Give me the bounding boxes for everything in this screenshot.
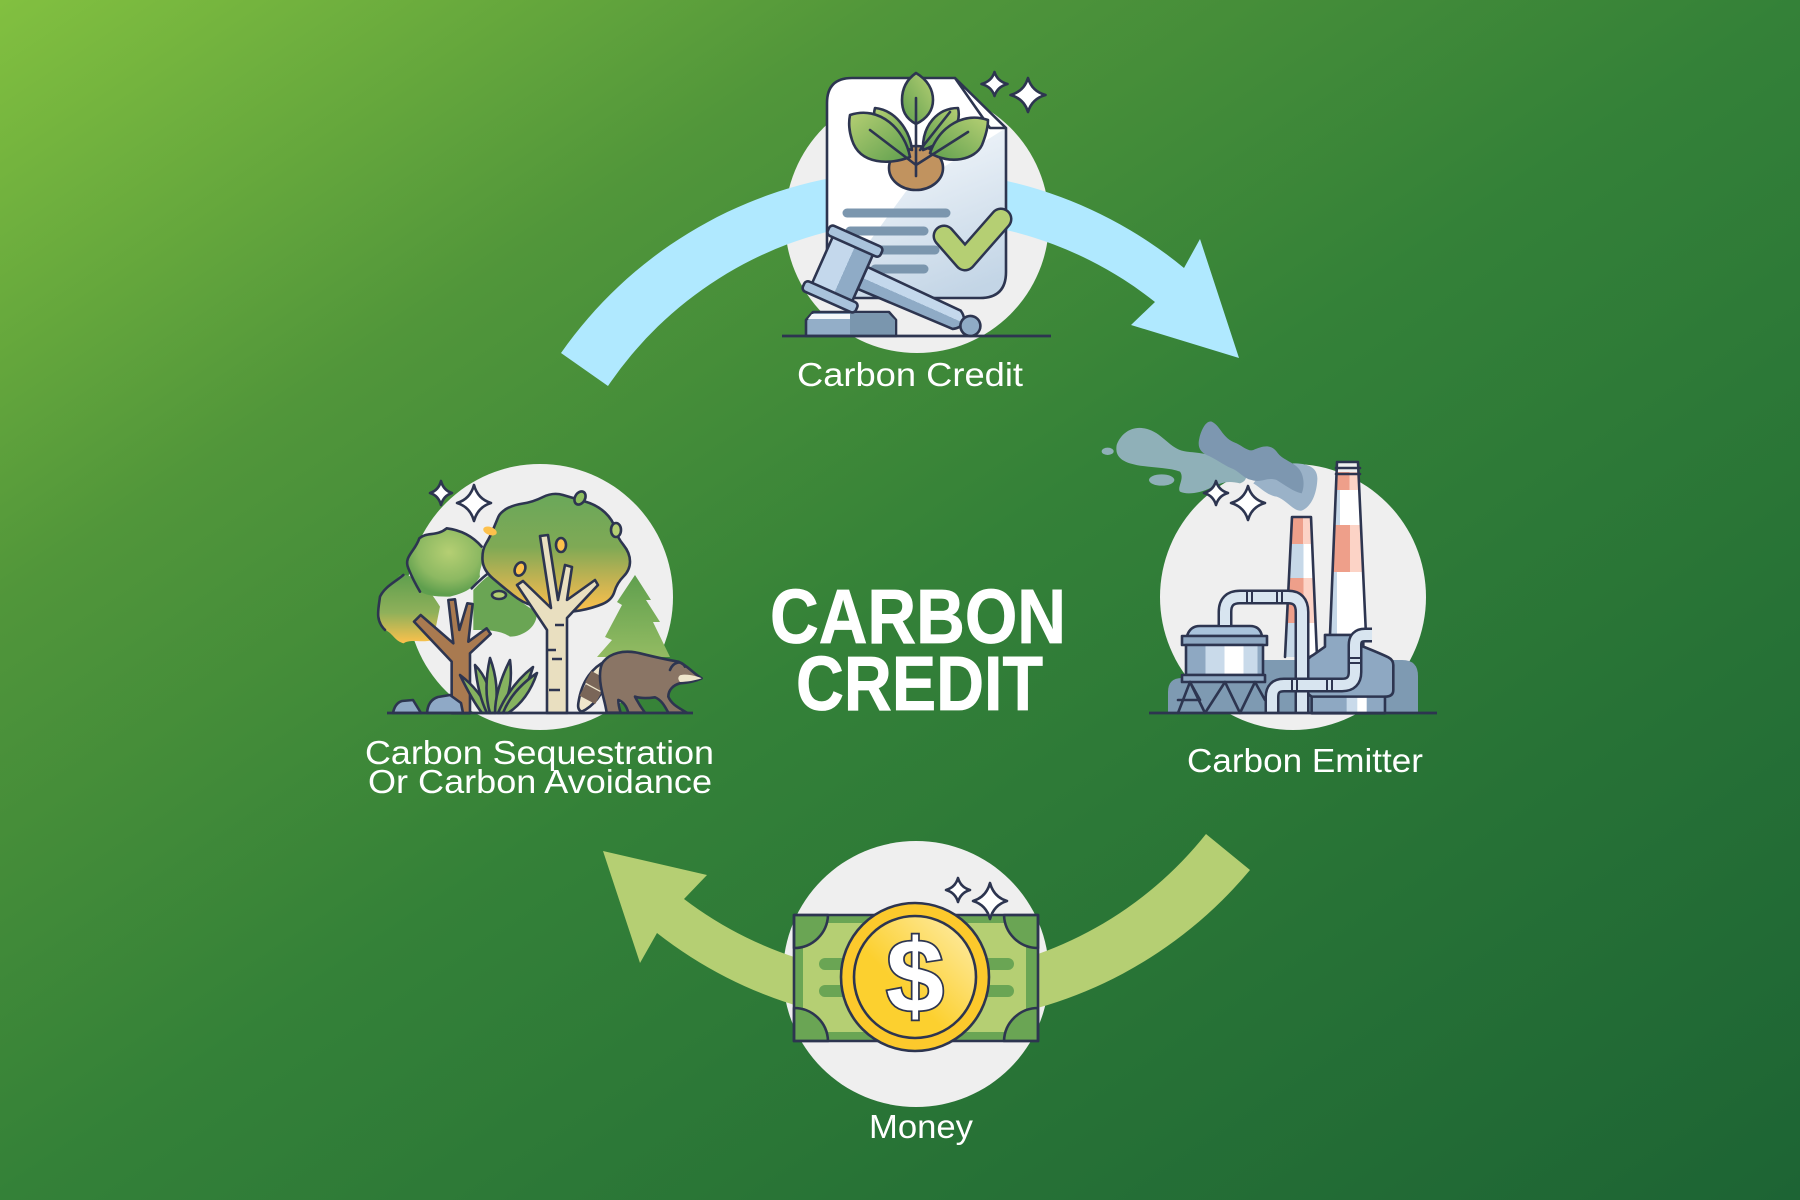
check mark [944,219,1001,260]
title: Carbon Credit: CARBON [770,574,1066,660]
large chimney [1330,462,1366,635]
sparkles [430,481,491,521]
circle: carbon credit backdrop [785,89,1049,353]
sparkles [946,878,1007,919]
sparkles [1204,481,1265,520]
right tree trunk [517,535,598,713]
gavel base [806,312,896,336]
arrow: blue curved arrow from sequestration to emitter [561,170,1239,386]
circle: money backdrop [783,841,1049,1107]
right tree leaves [482,489,621,599]
ground line [387,712,693,714]
sparkles [982,72,1046,112]
pipes [1225,590,1372,712]
background plant silhouette [1168,660,1418,713]
coin: $ [886,919,944,1035]
pine tree [597,575,670,657]
birch bark marks [548,625,564,690]
document sheet [827,78,1006,298]
left tree trunk [414,599,491,713]
banknote [794,915,1038,1041]
left tank [1178,626,1267,713]
circle: carbon emitter backdrop [1160,464,1426,730]
arrow: green curved arrow from emitter to sequestration [603,834,1250,1024]
icon: factory with smoke [1102,421,1437,713]
small chimney [1285,517,1317,657]
plant sprout with soil [849,73,988,190]
icon: trees, plants and raccoon [378,481,702,713]
gavel [801,224,994,363]
rocks [393,695,463,713]
smoke [1102,421,1317,511]
title: Carbon Credit [770,574,1066,727]
icon: certificate document with plant and gavel [782,72,1051,363]
left tree crown [378,528,537,643]
label: Carbon Sequestration Or Carbon Avoidance: Carbon Sequestration [365,734,714,771]
right tank [1307,635,1393,713]
label: Carbon Credit: Carbon Credit [797,356,1023,393]
ground line [1149,712,1437,714]
grass [460,658,537,713]
right tree crown [482,494,630,612]
label: Carbon Sequestration Or Carbon Avoidance: Or Carbon Avoidance [368,763,712,800]
icon: banknote and dollar coin [794,878,1038,1051]
ground line [782,335,1051,337]
label: Carbon Emitter: Carbon Emitter [1187,742,1423,779]
title: Carbon Credit: CREDIT [796,641,1043,727]
raccoon [578,652,702,713]
circle: carbon sequestration backdrop [407,464,673,730]
label: Carbon Sequestration Or Carbon Avoidance [365,734,714,800]
label: Money: Money [869,1108,974,1145]
text lines on document [847,213,946,269]
coin [841,903,989,1051]
